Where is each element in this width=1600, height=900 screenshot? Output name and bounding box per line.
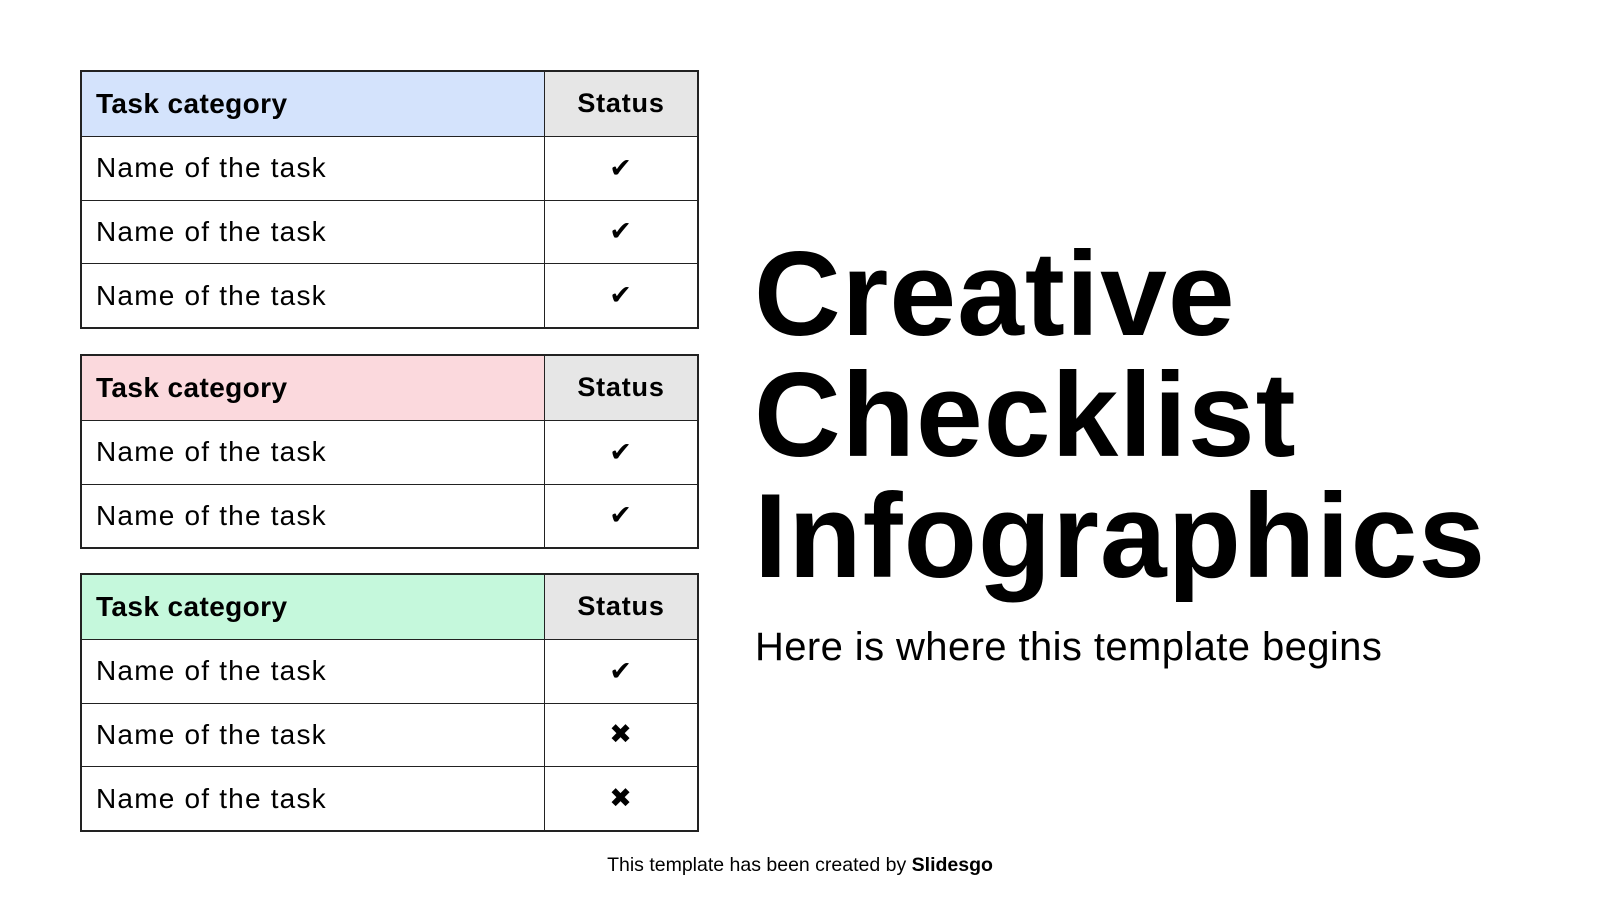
task row: ✔ bbox=[609, 437, 633, 467]
subtitle: Here is where this template begins bbox=[755, 625, 1382, 669]
task row: Name of the task bbox=[96, 500, 327, 531]
task row: Name of the task bbox=[96, 436, 327, 467]
task row: ✔ bbox=[609, 656, 633, 686]
table: category 3 bbox=[80, 573, 699, 832]
table: category 2 bbox=[80, 354, 699, 549]
task row bbox=[82, 484, 697, 547]
task row bbox=[82, 200, 697, 263]
header row 2: Task category bbox=[96, 372, 287, 403]
task row: Name of the task bbox=[96, 280, 327, 311]
task row: ✔ bbox=[609, 280, 633, 310]
header row 3: Status bbox=[577, 591, 665, 621]
task row: ✖ bbox=[609, 719, 633, 749]
task row: Name of the task bbox=[96, 216, 327, 247]
header row 2 bbox=[82, 356, 697, 420]
task row: Name of the task bbox=[96, 152, 327, 183]
footer credit: This template has been created by Slidesgo bbox=[607, 854, 993, 876]
task row: ✔ bbox=[609, 153, 633, 183]
header row 1: Status bbox=[577, 88, 665, 118]
task row: Name of the task bbox=[96, 655, 327, 686]
title bbox=[754, 227, 1486, 603]
task row: ✖ bbox=[609, 783, 633, 813]
header row 1: Task category bbox=[96, 88, 287, 119]
task row bbox=[82, 420, 697, 484]
title: Infographics bbox=[754, 469, 1486, 603]
task row bbox=[82, 639, 697, 703]
title: Checklist bbox=[754, 348, 1297, 482]
table: category 1 bbox=[80, 70, 699, 329]
task row bbox=[82, 766, 697, 830]
header row 3: Task category bbox=[96, 591, 287, 622]
task row: Name of the task bbox=[96, 719, 327, 750]
header row 1 bbox=[82, 72, 697, 136]
task row bbox=[82, 703, 697, 766]
task row bbox=[82, 136, 697, 200]
header row 3 bbox=[82, 575, 697, 639]
task row: ✔ bbox=[609, 216, 633, 246]
task row bbox=[82, 263, 697, 327]
task row: Name of the task bbox=[96, 783, 327, 814]
title: Creative bbox=[754, 227, 1236, 361]
header row 2: Status bbox=[577, 372, 665, 402]
task row: ✔ bbox=[609, 500, 633, 530]
